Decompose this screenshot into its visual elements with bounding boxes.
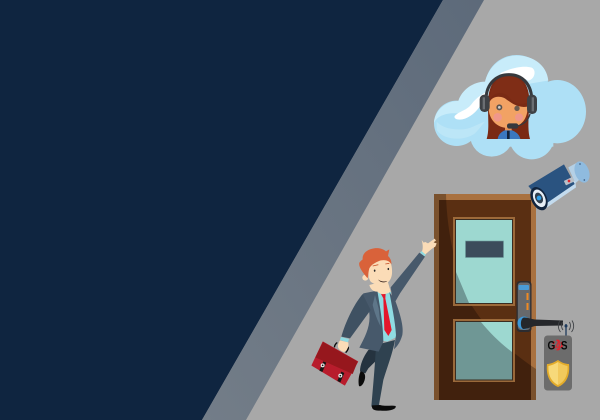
eyes	[496, 104, 502, 110]
slate diagonal band	[202, 0, 484, 420]
lowered hand	[338, 340, 348, 352]
door shadow frame	[434, 194, 536, 400]
lens	[527, 184, 551, 213]
rear shoe	[359, 371, 365, 386]
cloud	[434, 55, 586, 159]
raised arm	[391, 253, 425, 305]
neck	[369, 280, 391, 294]
cloud highlights	[454, 93, 487, 120]
neck	[505, 125, 512, 130]
eyes	[374, 269, 375, 272]
cloud with support agent	[434, 55, 586, 159]
businessman	[312, 239, 437, 411]
lowered arm	[341, 294, 371, 338]
door leaf	[439, 200, 531, 400]
ear	[362, 275, 368, 281]
rear leg	[360, 345, 383, 373]
door	[434, 194, 536, 400]
briefcase	[312, 342, 358, 385]
mouth	[378, 279, 387, 282]
logo	[564, 177, 574, 185]
signal antenna	[558, 320, 574, 336]
lower window	[453, 319, 515, 382]
camera body underside	[540, 181, 576, 210]
jacket	[359, 291, 383, 352]
smart lock	[516, 281, 563, 332]
agent	[480, 74, 537, 139]
raised hand	[422, 239, 437, 254]
red tie	[380, 293, 392, 336]
front leg	[371, 340, 395, 407]
cheeks	[493, 113, 502, 122]
camera body	[528, 164, 575, 205]
fringe	[489, 75, 528, 104]
shield icon	[547, 360, 569, 387]
lowered cuff	[340, 337, 349, 342]
upper window	[453, 217, 515, 306]
navy diagonal panel	[0, 0, 443, 420]
security camera	[527, 159, 592, 213]
wall mount	[568, 161, 583, 183]
face	[489, 97, 527, 128]
shirt	[377, 292, 397, 342]
hair	[359, 248, 391, 278]
G4S security tag	[544, 320, 574, 390]
door handle	[521, 318, 563, 329]
cuff	[420, 251, 426, 256]
hair back	[487, 74, 530, 139]
mail slot	[466, 241, 504, 258]
headset	[486, 75, 532, 98]
uniform	[498, 129, 520, 139]
G4S logo: G4S	[548, 338, 568, 352]
front shoe	[372, 405, 396, 411]
door frame	[434, 194, 536, 400]
head	[368, 257, 392, 284]
